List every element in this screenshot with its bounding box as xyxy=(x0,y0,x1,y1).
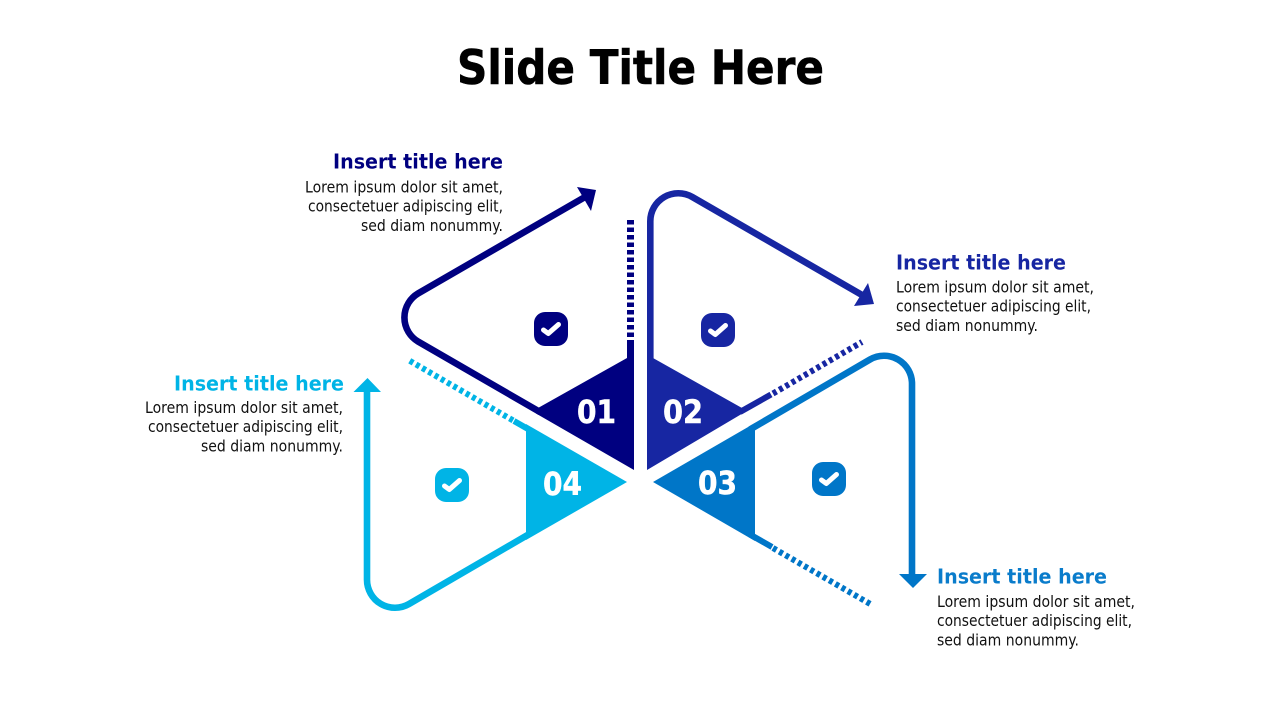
icon: check 03 xyxy=(812,462,846,496)
text block: step 03: Insert title here xyxy=(937,564,1107,588)
title: Slide Title Here xyxy=(457,41,824,96)
number 02: 02 xyxy=(663,393,703,431)
number 04: 04 xyxy=(543,465,582,503)
icon: check 01 xyxy=(534,312,568,346)
arrowhead 03 xyxy=(899,574,927,588)
divider 04 xyxy=(409,360,535,433)
text block: step 04: Insert title here xyxy=(174,372,344,396)
arrow path 01 xyxy=(404,197,585,412)
divider 01 xyxy=(627,220,634,337)
text block: step 01: consectetuer adipiscing elit, xyxy=(308,196,503,216)
divider 03 xyxy=(750,534,872,605)
arrow path 02 xyxy=(650,193,862,362)
text block: step 04: sed diam nonummy. xyxy=(201,436,343,456)
arrowhead 01 xyxy=(577,187,596,211)
text block: step 04 xyxy=(145,372,344,456)
triangle 02 xyxy=(647,354,745,470)
triangle 01 xyxy=(536,340,634,470)
triangle 03 xyxy=(653,423,755,541)
text block: step 04: consectetuer adipiscing elit, xyxy=(148,417,343,436)
text block: step 02: Insert title here xyxy=(896,250,1066,274)
text block: step 03: consectetuer adipiscing elit, xyxy=(937,611,1132,630)
icon: check 04 xyxy=(435,468,469,502)
icon: check 02 xyxy=(701,313,735,347)
number 03: 03 xyxy=(698,464,737,502)
arrowhead 04 xyxy=(354,378,381,392)
text block: step 02: Lorem ipsum dolor sit amet, xyxy=(896,278,1094,296)
text block: step 02: consectetuer adipiscing elit, xyxy=(896,296,1091,316)
text block: step 03: sed diam nonummy. xyxy=(937,630,1079,650)
text block: step 03 xyxy=(937,564,1135,650)
panel: step 04 xyxy=(354,360,627,608)
text block: step 01: Insert title here xyxy=(333,150,503,174)
text block: step 01: Lorem ipsum dolor sit amet, xyxy=(305,178,503,196)
text block: step 02: sed diam nonummy. xyxy=(896,316,1038,335)
text block: step 03: Lorem ipsum dolor sit amet, xyxy=(937,592,1135,611)
arrow path 04 xyxy=(367,390,531,608)
divider 02 xyxy=(740,342,862,412)
panel: step 02 xyxy=(647,193,874,470)
text block: step 01: sed diam nonummy. xyxy=(361,216,503,235)
text block: step 04: Lorem ipsum dolor sit amet, xyxy=(145,398,343,417)
panel: step 01 xyxy=(404,187,634,470)
arrowhead 02 xyxy=(854,283,874,306)
arrow path 03 xyxy=(750,356,912,576)
text block: step 01 xyxy=(305,150,503,235)
panel: step 03 xyxy=(653,356,927,605)
triangle 04 xyxy=(526,424,627,540)
text block: step 02 xyxy=(896,250,1094,335)
number 01: 01 xyxy=(577,393,616,431)
